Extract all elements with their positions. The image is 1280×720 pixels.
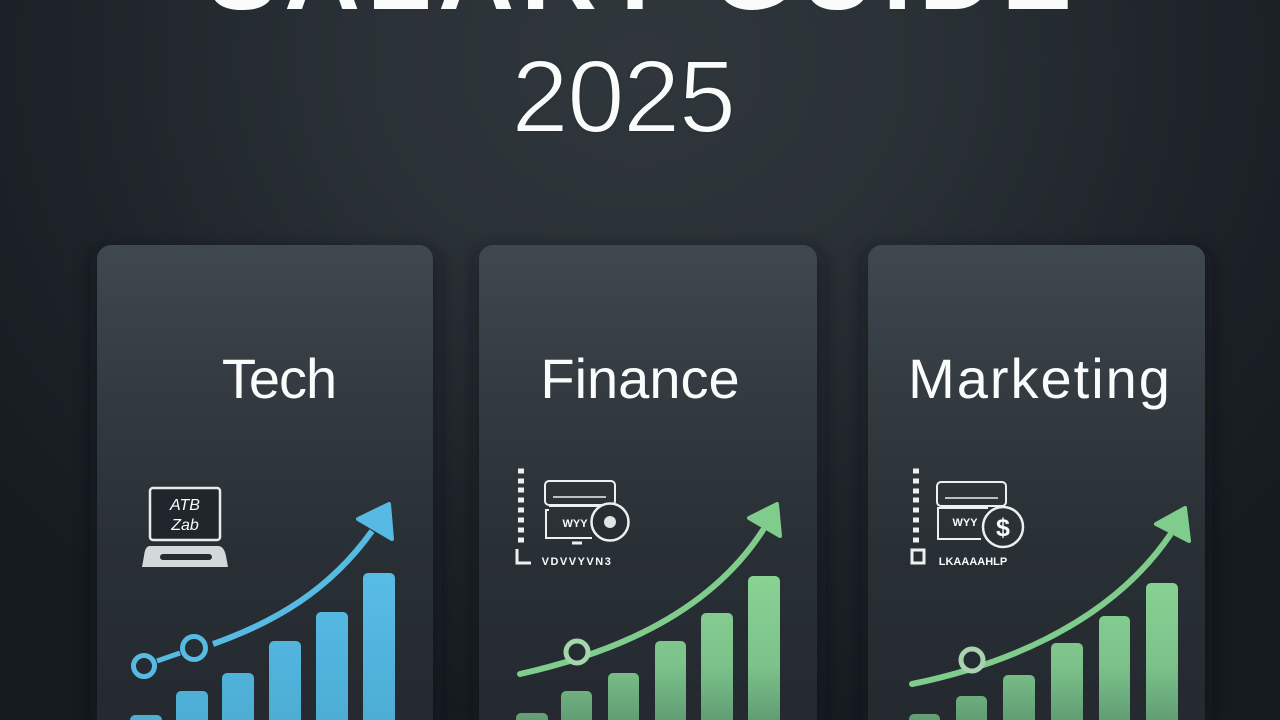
icon: laptop: Zab (170, 517, 199, 534)
icon: marketing screen: $ (996, 514, 1010, 542)
icon: finance screen: VDVVYVN3 (542, 556, 612, 568)
icon: marketing screen: WYY (952, 517, 978, 529)
arrow: finance growth (520, 504, 780, 674)
icon: marketing screen: LKAAAAHLP (939, 556, 1007, 568)
panel: marketing (862, 245, 1212, 720)
icon: marketing screen (912, 471, 1023, 568)
icon: laptop (142, 488, 228, 567)
panel: finance (473, 245, 825, 720)
icon: finance screen (517, 471, 628, 568)
bar chart: marketing (909, 583, 1178, 720)
bar chart: finance (516, 576, 780, 720)
heading: finance: Finance (540, 347, 740, 410)
heading: marketing: Marketing (908, 347, 1172, 410)
arrow: tech growth (134, 504, 392, 676)
bar chart: tech (130, 573, 395, 720)
icon: laptop: ATB (169, 497, 200, 514)
icon: finance screen: WYY (562, 518, 588, 530)
panel: tech (91, 245, 441, 720)
subtitle: year: 2025 (511, 39, 735, 154)
heading: tech: Tech (222, 347, 336, 410)
arrow: marketing growth (912, 508, 1189, 684)
